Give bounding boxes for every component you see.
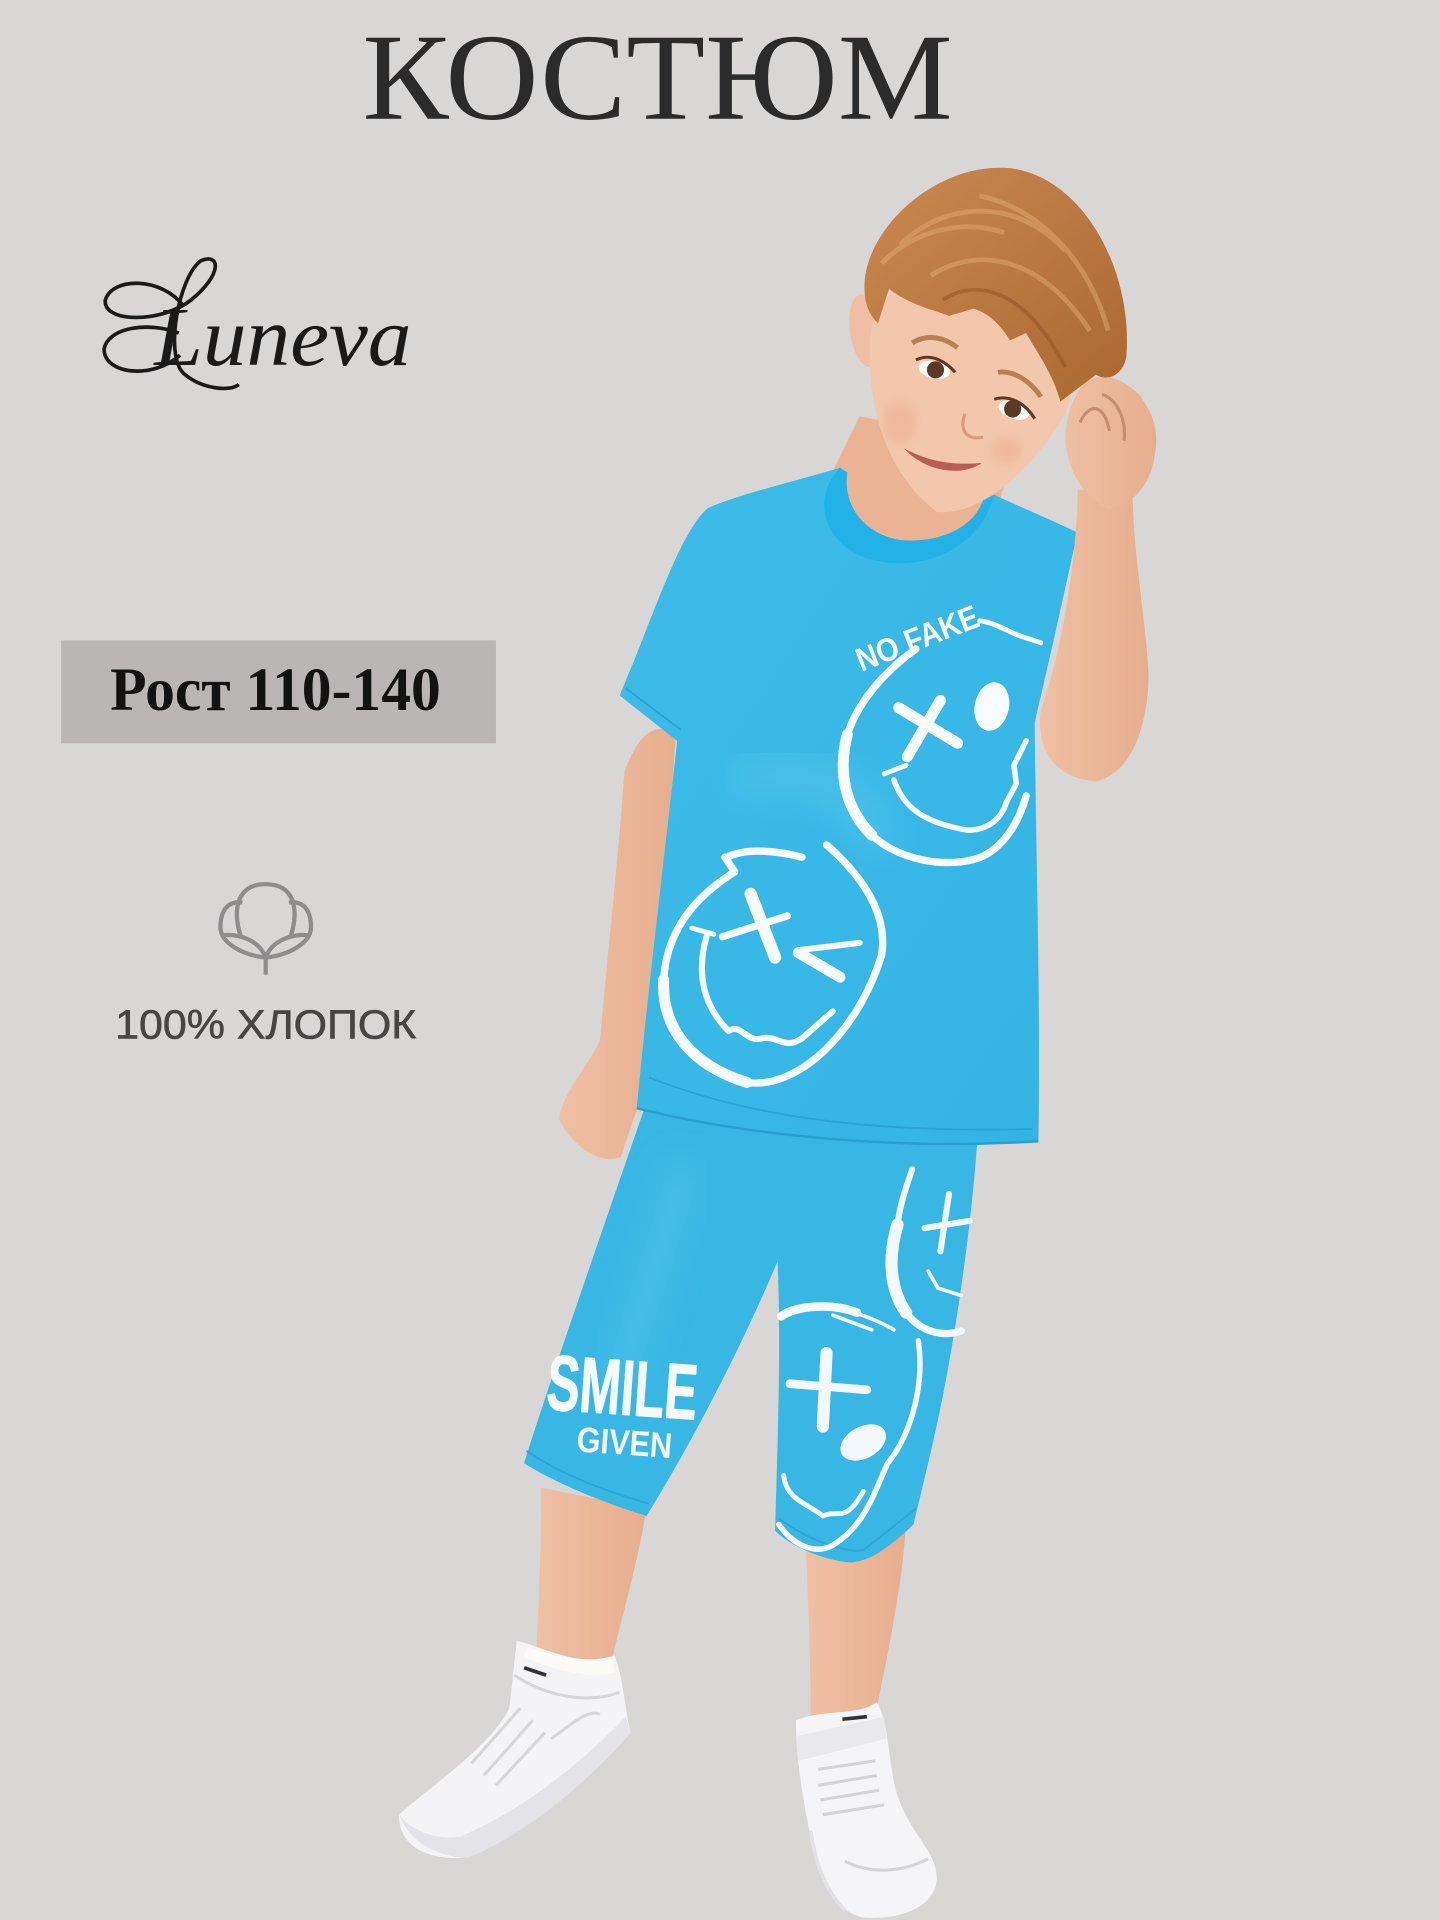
lower smiley print: [664, 845, 883, 1083]
logo: Luneva: Luneva: [153, 292, 411, 384]
logo: Luneva: [104, 259, 411, 388]
size badge: [61, 640, 496, 743]
neck: [833, 416, 1022, 545]
upper smiley slogan: NO FAKE: [851, 599, 984, 679]
shorts print: [779, 1169, 970, 1549]
hair: [864, 168, 1127, 402]
upper smiley eye: [970, 679, 1014, 734]
shorts eye: [834, 1417, 892, 1468]
boy figure: [399, 168, 1156, 1918]
size badge: Рост 110-140: [110, 656, 441, 724]
shorts slogan: SMILE: [544, 1338, 701, 1437]
icon: cotton: [220, 884, 311, 975]
eyes: [917, 358, 952, 381]
legs: [536, 1488, 906, 1717]
t-shirt: [620, 468, 1078, 1144]
head: [845, 168, 1127, 512]
left arm: [559, 729, 676, 1159]
shorts sub-slogan: GIVEN: [575, 1419, 674, 1466]
shorts: [524, 1078, 980, 1562]
upper smiley print: [843, 621, 1041, 862]
title: КОСТЮМ: [362, 9, 953, 146]
left shoe: [399, 1641, 631, 1858]
material label: 100% ХЛОПОК: [115, 1001, 417, 1047]
right shoe: [796, 1702, 937, 1918]
nose and mouth: [963, 414, 983, 438]
right arm and hand: [1040, 377, 1156, 781]
